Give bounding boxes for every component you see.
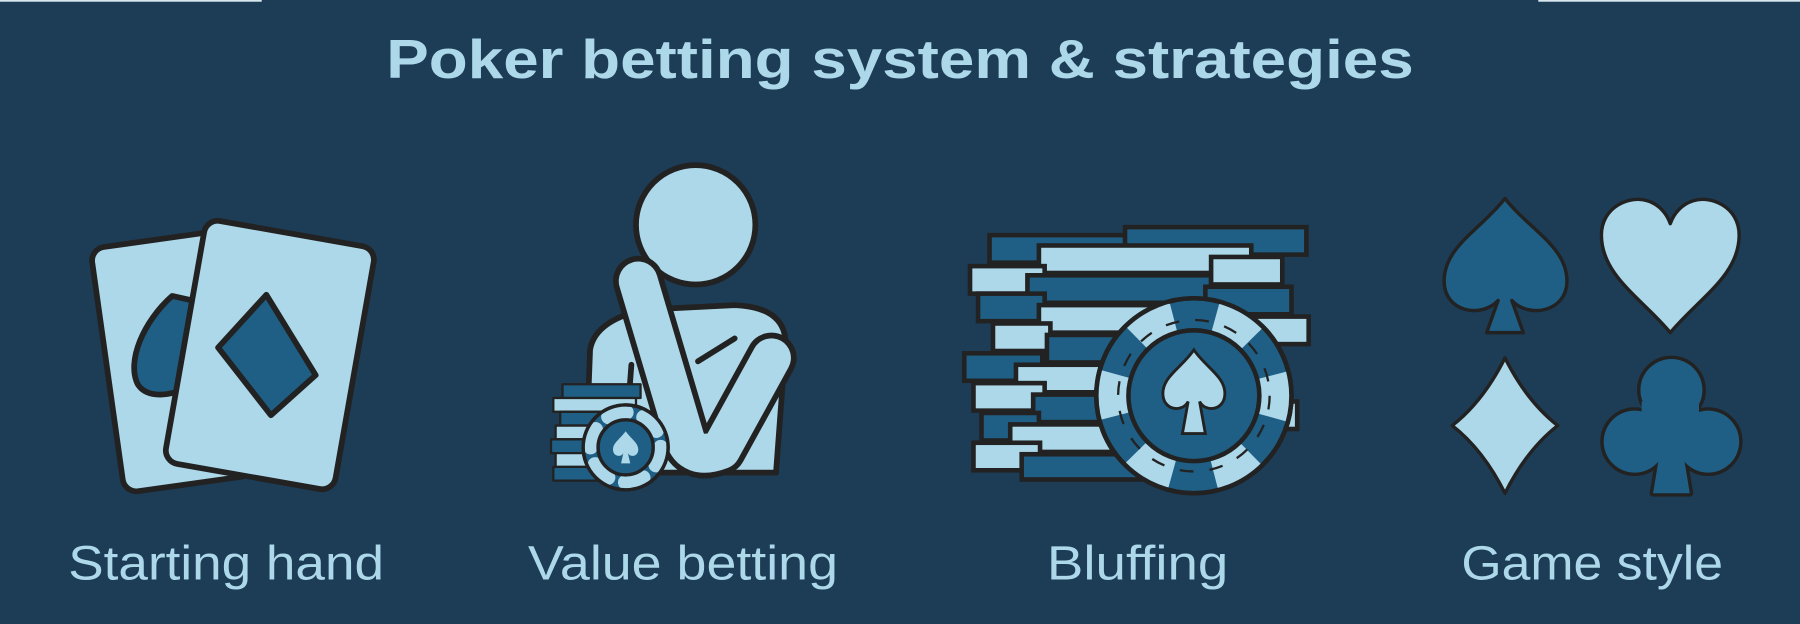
icon: chip stacks bluffing [964, 227, 1309, 493]
label: bluffing: Bluffing [1047, 536, 1228, 590]
title: Poker betting system & strategies [386, 28, 1414, 90]
label: starting hand: Starting hand [68, 536, 384, 590]
icon: card suits [1444, 198, 1739, 493]
icon: thinking person with chips [551, 165, 787, 490]
label: value betting: Value betting [528, 536, 838, 590]
label: game style: Game style [1461, 536, 1723, 590]
icon: starting hand cards [90, 219, 376, 493]
